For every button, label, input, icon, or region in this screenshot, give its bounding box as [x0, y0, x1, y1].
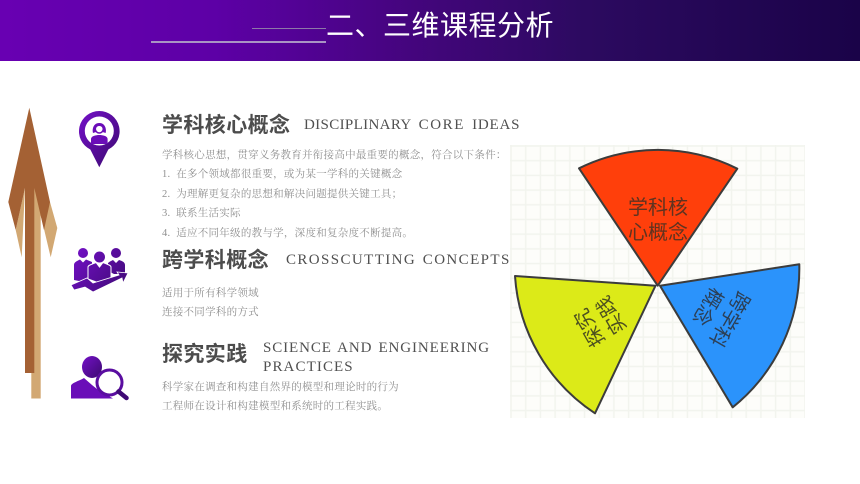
upward arrow [8, 108, 57, 398]
text block: crosscutting [162, 287, 259, 318]
text block: crosscutting: 适用于所有科学领域 [162, 288, 259, 299]
heading: core concepts: 学科核心概念 [162, 114, 290, 137]
heading: crosscutting: 跨学科概念 [162, 249, 269, 272]
text block: practices [162, 381, 399, 412]
text block: core concepts: 3. 联系生活实际 [162, 208, 241, 219]
text block: practices: 科学家在调查和构建自然界的模型和理论时的行为 [162, 382, 399, 393]
icon: team with arrow [71, 248, 128, 292]
sector label: practices: 实践 [592, 292, 631, 338]
sector label: crosscutting concepts: 概念 [688, 283, 728, 330]
banner title text: 二、三维课程分析 [326, 10, 554, 41]
grid background [510, 145, 805, 418]
text block: core concepts: 学科核心思想，贯穿义务教育并衔接高中最重要的概念，符合以下条件： [162, 150, 507, 161]
pie chart: three sectors [515, 150, 799, 413]
sector: crosscutting concepts [660, 264, 799, 407]
icon: person with magnifier [71, 356, 126, 398]
sector label: core concepts: 心概念 [628, 220, 688, 244]
icon: location pin with person [79, 111, 120, 167]
text block: core concepts [162, 149, 507, 239]
english heading: practices: SCIENCE AND ENGINEERING [263, 340, 490, 356]
sector label: crosscutting concepts: 跨学科 [704, 287, 753, 350]
text block: practices: 工程师在设计和构建模型和系统时的工程实践。 [162, 401, 388, 412]
title underlines [151, 28, 326, 43]
sector: practices [515, 276, 656, 413]
text block: crosscutting: 连接不同学科的方式 [162, 307, 259, 318]
english heading: core ideas: DISCIPLINARY CORE IDEAS [304, 117, 520, 133]
english heading: practices: PRACTICES [263, 359, 354, 375]
text block: core concepts: 4. 适应不同年级的教与学，深度和复杂度不断提高。 [162, 228, 413, 239]
title banner [0, 0, 860, 61]
sector: core concepts [579, 150, 737, 286]
sector label: practices: 探究 [571, 304, 610, 350]
text block: core concepts: 1. 在多个领域都很重要，或为某一学科的关键概念 [162, 169, 402, 180]
english heading: crosscutting: CROSSCUTTING CONCEPTS [286, 252, 511, 268]
sector label: core concepts: 学科核 [628, 197, 688, 219]
text block: core concepts: 2. 为理解更复杂的思想和解决问题提供关键工具； [162, 189, 402, 200]
heading: practices: 探究实践 [162, 343, 248, 366]
english heading: practices [263, 340, 490, 375]
